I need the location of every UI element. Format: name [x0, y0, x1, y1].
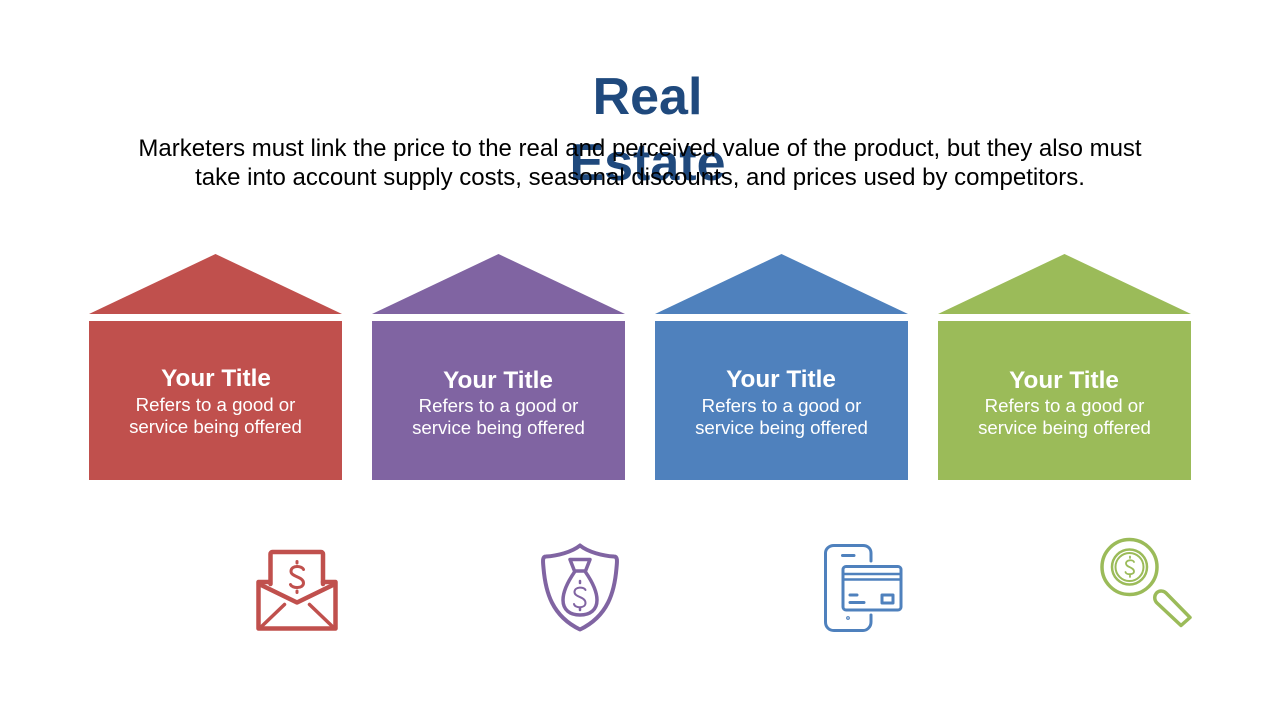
blue body: Your Title — [726, 366, 836, 393]
red body: service being offered — [129, 416, 302, 437]
intro text: take into account supply costs, seasonal discounts, and prices used by competitors. — [195, 164, 1085, 191]
green body: Your Title — [1009, 367, 1119, 394]
panel: blue house — [655, 254, 908, 480]
panel: green house — [938, 254, 1191, 480]
green body: service being offered — [978, 417, 1151, 438]
purple body: Refers to a good or — [419, 395, 578, 416]
red body: Refers to a good or — [136, 394, 295, 415]
green body — [938, 321, 1191, 480]
green roof — [938, 254, 1191, 314]
title — [569, 68, 726, 192]
panel: red house — [89, 254, 342, 480]
blue body — [655, 321, 908, 480]
purple body: Your Title — [443, 367, 553, 394]
blue body: Refers to a good or — [702, 395, 861, 416]
title: Estate — [569, 134, 726, 192]
red roof — [89, 254, 342, 314]
red body: Your Title — [161, 365, 271, 392]
green body: Refers to a good or — [985, 395, 1144, 416]
purple body: service being offered — [412, 417, 585, 438]
blue body: service being offered — [695, 417, 868, 438]
purple body — [372, 321, 625, 480]
intro text: Marketers must link the price to the real and perceived value of the product, but they also must — [138, 135, 1142, 162]
purple roof — [372, 254, 625, 314]
blue roof — [655, 254, 908, 314]
red body — [89, 321, 342, 480]
intro text — [138, 135, 1142, 191]
panel: purple house — [372, 254, 625, 480]
title: Real — [593, 68, 702, 126]
